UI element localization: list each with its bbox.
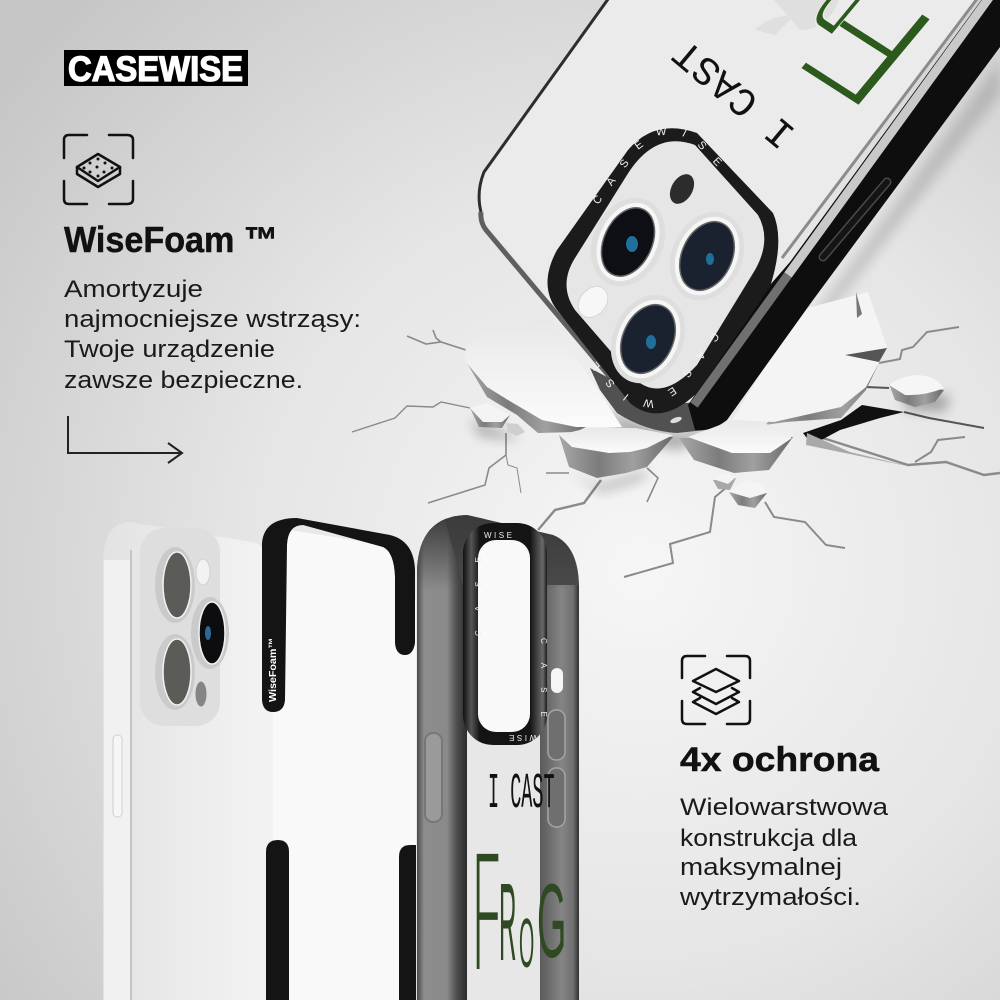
- rubble chunk: small round right: [889, 375, 944, 407]
- clear panel: [467, 650, 540, 1000]
- text block: 4x ochrona description: konstrukcja dla: [680, 825, 857, 852]
- text block: 4x ochrona description: Wielowarstwowa: [680, 794, 888, 821]
- lens: bottom: [155, 634, 195, 710]
- lens: top: [155, 547, 195, 623]
- band: light strip: [788, 0, 991, 275]
- WiseFoam frame: black: [262, 518, 415, 712]
- ring opening: [478, 540, 530, 732]
- phone: white, back view: [103, 522, 275, 1000]
- rubble chunks: small bottom: [713, 473, 767, 508]
- heading: 4x ochrona: 4x ochrona: [680, 741, 880, 779]
- side button: [823, 182, 887, 257]
- band: lower gray strip: [694, 275, 788, 405]
- text block: WiseFoam description: najmocniejsze wstrząsy:: [64, 306, 361, 333]
- ring text: CASEWISE: [594, 128, 722, 204]
- case clear panel: [480, 0, 980, 405]
- ring text: right: CASE: [539, 638, 548, 736]
- case band: black: [688, 0, 1000, 430]
- print: I CAST: I CAST: [488, 767, 555, 823]
- case edge: lower left: [481, 212, 625, 395]
- print: FROG: [472, 814, 566, 1000]
- WiseFoam insert: white panel: [273, 530, 416, 1000]
- flash cutout: [551, 668, 563, 693]
- print: FROG: O: [519, 903, 534, 982]
- camera ring: [548, 128, 778, 413]
- text block: WiseFoam description: Twoje urządzenie: [64, 336, 275, 363]
- side button: [113, 735, 122, 817]
- ring text: bottom: WISE: [507, 733, 537, 742]
- text block: 4x ochrona description: wytrzymałości.: [679, 884, 861, 911]
- phone case: top, tilted: [478, 0, 1000, 433]
- text block: 4x ochrona description: maksymalnej: [680, 854, 842, 881]
- phone side strip: [104, 560, 131, 1000]
- camera plateau: [566, 141, 764, 389]
- wall cracks: [352, 327, 1000, 577]
- camera plateau: [140, 528, 220, 726]
- crack shadows: [470, 60, 1000, 492]
- icon: layers: [682, 656, 750, 724]
- cracked plate: left: [464, 318, 622, 433]
- flash hole: [665, 170, 699, 208]
- print: FROG: R: [499, 861, 516, 983]
- faint print shadow: [755, 0, 840, 35]
- print: FROG: G: [537, 863, 566, 980]
- logo: CASEWISE: CASEWISE: [68, 50, 243, 89]
- lens: lower: [597, 283, 699, 395]
- case edge: upper left: [479, 0, 611, 212]
- text block: WiseFoam description: [64, 276, 361, 394]
- flash: [196, 559, 210, 585]
- sensor: [195, 681, 207, 707]
- ring text: left: CASE: [474, 538, 483, 636]
- WiseFoam frame: lower right bar: [399, 845, 416, 1000]
- text block: 4x ochrona description: [679, 794, 888, 911]
- rubble chunk: small left: [470, 403, 525, 436]
- heading: WiseFoam: WiseFoam ™: [64, 219, 278, 260]
- button: left: [425, 733, 442, 822]
- cracked plate: right: [732, 292, 912, 467]
- camera ring: [463, 523, 547, 745]
- print: I CAST: I CAST: [666, 28, 805, 156]
- lens: middle: [191, 597, 229, 669]
- case cap shading: [417, 515, 579, 590]
- lens: upper: [577, 186, 679, 298]
- label: WiseFoam on strip: WiseFoam™: [267, 638, 279, 702]
- case strip: left: [417, 520, 467, 1000]
- button: right lower: [548, 768, 565, 827]
- text block: WiseFoam description: zawsze bezpieczne.: [64, 367, 303, 394]
- lens: right: [656, 200, 758, 312]
- icon: foam: [64, 135, 133, 204]
- phone case: bottom, dark: [417, 515, 579, 1000]
- ring text: top: WISE: [484, 531, 514, 540]
- case strip: right: [540, 585, 579, 1000]
- WiseFoam frame: lower left bar: [266, 840, 289, 1000]
- rubble chunk: centre left: [559, 428, 673, 478]
- button: right upper: [548, 710, 565, 760]
- band: sheen line: [782, 0, 980, 258]
- ring text lower: CASEWISE: [592, 334, 718, 408]
- rubble chunk: centre right: [679, 420, 793, 473]
- arrow: [68, 416, 182, 463]
- microphone dot: [572, 281, 614, 323]
- case tip: gray: [590, 368, 722, 433]
- tip highlight: [670, 416, 682, 424]
- text block: WiseFoam description: Amortyzuje: [64, 276, 203, 303]
